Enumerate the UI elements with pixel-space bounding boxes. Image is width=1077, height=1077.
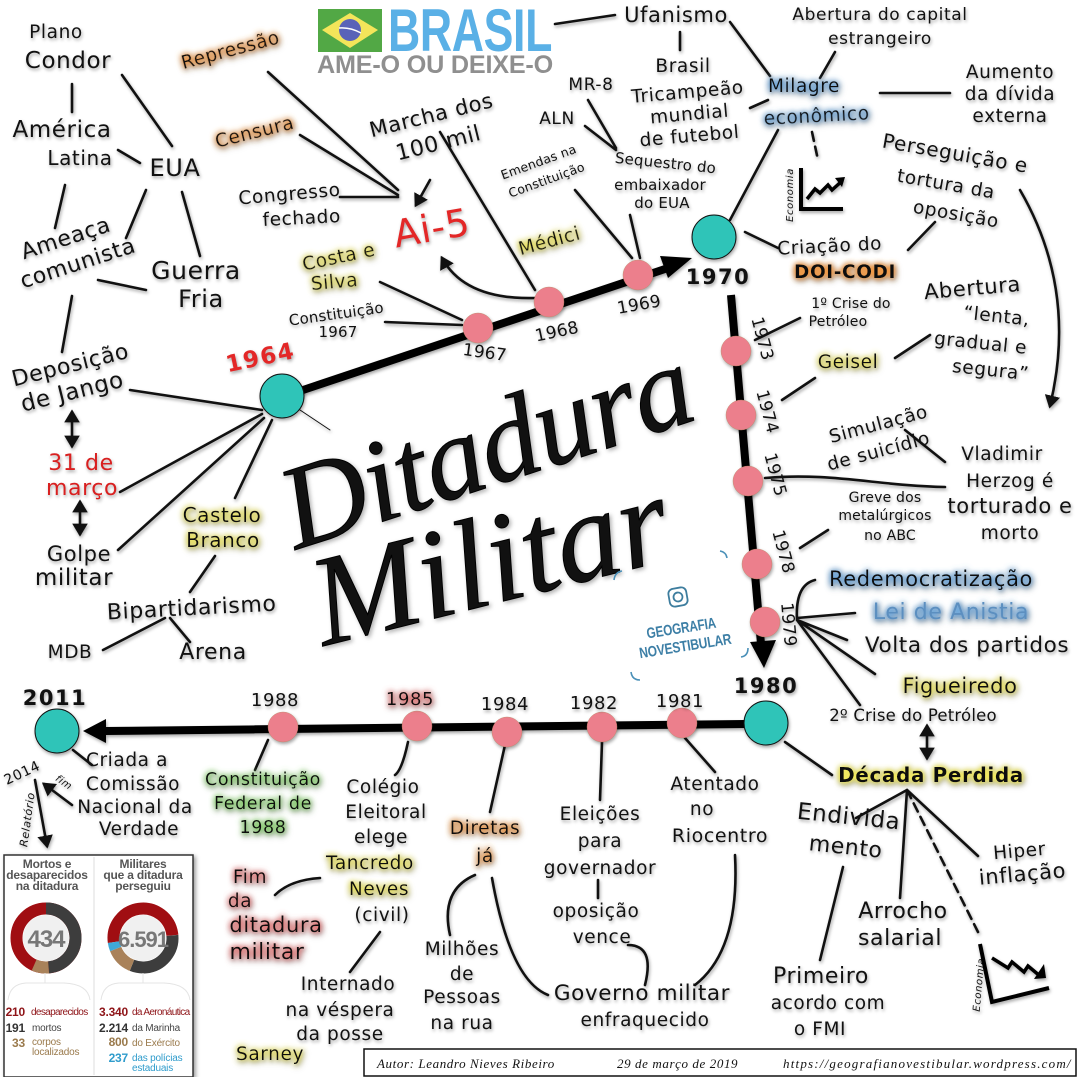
stats left legend: 191 bbox=[6, 1021, 26, 1035]
stats left legend: mortos bbox=[32, 1023, 62, 1034]
bottom right cluster: Década Perdida: o FMI bbox=[794, 1019, 846, 1040]
bottom cluster: events 1981 to 1988: vence bbox=[573, 927, 631, 948]
right cluster: 1973 to 1979: Década Perdida bbox=[838, 763, 1024, 787]
year labels: 1968 bbox=[533, 318, 581, 346]
stats right legend: da Marinha bbox=[132, 1023, 181, 1034]
top centre cluster: AI-5 bbox=[179, 27, 717, 341]
bottom cluster: events 1981 to 1988: na véspera bbox=[286, 1000, 394, 1021]
top right cluster: Milagre econômico: Abertura do capital bbox=[792, 5, 968, 25]
icon: instagram bbox=[668, 587, 688, 607]
top right cluster: Milagre econômico: estrangeiro bbox=[828, 29, 932, 49]
bottom cluster: events 1981 to 1988: Nacional da bbox=[77, 797, 193, 818]
bottom cluster: events 1981 to 1988 bbox=[2, 750, 768, 1065]
central title: Ditadura Militar: Militar bbox=[295, 447, 684, 674]
bottom right cluster: Década Perdida: inflação bbox=[978, 858, 1067, 890]
top centre cluster: AI-5: 1967 bbox=[319, 323, 357, 341]
bottom cluster: events 1981 to 1988: de bbox=[450, 964, 474, 985]
bottom cluster: events 1981 to 1988: militar bbox=[229, 940, 305, 965]
bottom cluster: events 1981 to 1988: Criada a bbox=[86, 750, 168, 771]
corner marks bbox=[614, 551, 748, 680]
left cluster: Plano Condor, EUA, Guerra Fria: Condor bbox=[25, 48, 111, 74]
top centre cluster: AI-5: Congresso bbox=[238, 180, 341, 209]
logo: Brasil ame-o ou deixe-o: AME-O OU DEIXE-O bbox=[317, 51, 553, 79]
right cluster: 1973 to 1979: Redemocratização bbox=[829, 567, 1033, 591]
arrows bbox=[35, 180, 1059, 846]
right cluster: 1973 to 1979: no ABC bbox=[864, 528, 916, 544]
right cluster: 1973 to 1979: Greve dos bbox=[849, 490, 921, 506]
instagram tag bbox=[614, 551, 748, 680]
left cluster: Plano Condor, EUA, Guerra Fria: EUA bbox=[150, 154, 200, 182]
bottom cluster: events 1981 to 1988: oposição bbox=[553, 901, 639, 922]
bottom right cluster: Década Perdida: Arrocho bbox=[858, 899, 948, 924]
year labels: 1979 bbox=[776, 602, 800, 647]
top centre cluster: AI-5: Marcha dos bbox=[367, 88, 496, 142]
year labels: 1964 bbox=[224, 338, 297, 378]
left cluster: Plano Condor, EUA, Guerra Fria: 31 de bbox=[48, 451, 114, 476]
top centre cluster: AI-5: Constituição bbox=[506, 159, 587, 201]
top right cluster: Milagre econômico: oposição bbox=[911, 197, 1001, 232]
right cluster: 1973 to 1979: segura” bbox=[951, 356, 1030, 385]
year labels: 1967 bbox=[461, 340, 508, 366]
top centre cluster: AI-5: 100 mil bbox=[393, 121, 484, 166]
year labels: 1969 bbox=[616, 291, 663, 319]
right cluster: 1973 to 1979: de suicídio bbox=[825, 428, 932, 475]
top right cluster: Milagre econômico: Criação do bbox=[777, 233, 883, 260]
right cluster: 1973 to 1979: “lenta, bbox=[962, 303, 1031, 330]
stats right legend: 3.340 bbox=[99, 1005, 129, 1019]
right cluster: 1973 to 1979: Volta dos partidos bbox=[865, 633, 1069, 658]
pink date nodes bbox=[268, 260, 780, 747]
stats left legend: 210 bbox=[6, 1005, 26, 1019]
left cluster: Plano Condor, EUA, Guerra Fria: Castelo bbox=[183, 503, 261, 527]
right cluster: 1973 to 1979: morto bbox=[981, 523, 1039, 544]
stats left legend: corpos bbox=[32, 1037, 61, 1048]
top centre cluster: AI-5: Repressão bbox=[179, 27, 282, 74]
bottom cluster: events 1981 to 1988: Diretas bbox=[450, 818, 520, 839]
icon: economy rising chart: Economia bbox=[785, 168, 796, 222]
top right cluster: Milagre econômico: de futebol bbox=[639, 122, 740, 151]
bottom cluster: events 1981 to 1988: no bbox=[690, 799, 714, 820]
bottom cluster: events 1981 to 1988: enfraquecido bbox=[580, 1010, 710, 1031]
top right cluster: Milagre econômico: externa bbox=[972, 106, 1048, 127]
bottom cluster: events 1981 to 1988: já bbox=[475, 846, 494, 867]
right cluster: 1973 to 1979: Geisel bbox=[818, 352, 878, 373]
stats right legend: do Exército bbox=[132, 1038, 180, 1049]
bottom cluster: events 1981 to 1988: na rua bbox=[430, 1013, 494, 1034]
stats right legend: 237 bbox=[109, 1051, 129, 1065]
right cluster: 1973 to 1979: Lei de Anistia bbox=[873, 600, 1029, 625]
bottom cluster: events 1981 to 1988: (civil) bbox=[354, 905, 410, 926]
panel: statistics: perseguiu bbox=[115, 879, 171, 893]
year labels: 1974 bbox=[751, 388, 782, 436]
bottom cluster: events 1981 to 1988: Tancredo bbox=[325, 853, 414, 874]
right cluster: 1973 to 1979: Figueiredo bbox=[902, 674, 1018, 698]
bottom cluster: events 1981 to 1988: Fim bbox=[233, 867, 267, 888]
left cluster: Plano Condor, EUA, Guerra Fria: março bbox=[46, 476, 118, 501]
top centre cluster: AI-5: Silva bbox=[310, 270, 359, 295]
footer: Autor: Leandro Nieves Ribeiro bbox=[376, 1056, 555, 1071]
left cluster: Plano Condor, EUA, Guerra Fria: Latina bbox=[47, 146, 113, 170]
bottom cluster: events 1981 to 1988: Federal de bbox=[214, 794, 312, 814]
icon: economy falling chart bbox=[972, 944, 1049, 1012]
right cluster: 1973 to 1979: gradual e bbox=[933, 328, 1028, 359]
bottom right cluster: Década Perdida: salarial bbox=[858, 926, 942, 951]
bottom cluster: events 1981 to 1988: ditadura bbox=[229, 913, 323, 937]
icon: Brazilian flag bbox=[318, 9, 382, 52]
top centre cluster: AI-5: MR-8 bbox=[568, 75, 614, 95]
panel: statistics: 434 bbox=[27, 926, 66, 953]
right cluster: 1973 to 1979: Abertura bbox=[923, 272, 1022, 304]
top right cluster: Milagre econômico: Perseguição e bbox=[881, 128, 1030, 178]
top right cluster: Milagre econômico bbox=[624, 3, 1055, 283]
panel: statistics: na ditadura bbox=[16, 879, 79, 893]
stats right legend: das polícias bbox=[132, 1053, 183, 1064]
top right cluster: Milagre econômico: DOI-CODI bbox=[794, 262, 896, 283]
year labels: 1981 bbox=[656, 691, 704, 712]
bottom cluster: events 1981 to 1988: Governo militar bbox=[554, 981, 730, 1006]
top centre cluster: AI-5: Ai-5 bbox=[390, 200, 473, 257]
icon: economy rising chart bbox=[785, 168, 845, 222]
bottom right cluster: Década Perdida: Endivida bbox=[796, 799, 902, 835]
bottom cluster: events 1981 to 1988: Eleições bbox=[560, 804, 640, 825]
left cluster: Plano Condor, EUA, Guerra Fria: MDB bbox=[48, 642, 92, 663]
bottom cluster: events 1981 to 1988: elege bbox=[354, 827, 408, 848]
left cluster: Plano Condor, EUA, Guerra Fria: América bbox=[12, 117, 112, 143]
top centre cluster: AI-5: fechado bbox=[262, 206, 341, 231]
top centre cluster: AI-5: Constituição bbox=[288, 298, 385, 330]
left cluster: Plano Condor, EUA, Guerra Fria: militar bbox=[35, 565, 113, 591]
left cluster: Plano Condor, EUA, Guerra Fria: Golpe bbox=[47, 542, 111, 566]
bottom cluster: events 1981 to 1988: 1988 bbox=[240, 818, 286, 838]
top right cluster: Milagre econômico: Aumento bbox=[966, 62, 1054, 83]
bottom cluster: events 1981 to 1988: Milhões bbox=[425, 939, 499, 960]
left cluster: Plano Condor, EUA, Guerra Fria: Fria bbox=[178, 285, 224, 313]
bottom cluster: events 1981 to 1988: 2014 bbox=[2, 758, 43, 789]
footer: 29 de março de 2019 bbox=[617, 1056, 738, 1071]
year labels: 1973 bbox=[746, 315, 777, 363]
year labels: 1984 bbox=[481, 694, 529, 715]
left cluster: Plano Condor, EUA, Guerra Fria: Plano bbox=[29, 22, 83, 43]
top right cluster: Milagre econômico: Brasil bbox=[655, 56, 711, 77]
logo: Brasil ame-o ou deixe-o bbox=[317, 0, 553, 79]
icon: economy falling chart: Economia bbox=[972, 957, 987, 1012]
top right cluster: Milagre econômico: da dívida bbox=[965, 84, 1055, 105]
bottom right cluster: Década Perdida bbox=[771, 799, 1067, 1040]
left cluster: Plano Condor, EUA, Guerra Fria: Branco bbox=[186, 528, 260, 552]
left cluster: Plano Condor, EUA, Guerra Fria bbox=[9, 22, 277, 665]
year labels bbox=[23, 265, 800, 715]
brace lines bbox=[8, 973, 190, 1000]
stats right legend: estaduais bbox=[132, 1063, 173, 1074]
top right cluster: Milagre econômico: Tricampeão bbox=[630, 77, 745, 108]
year labels: 1980 bbox=[734, 674, 798, 698]
right cluster: 1973 to 1979: Simulação bbox=[827, 401, 930, 448]
top right cluster: Milagre econômico: Milagre bbox=[768, 76, 840, 97]
thin connector lines bbox=[55, 15, 978, 995]
left cluster: Plano Condor, EUA, Guerra Fria: Ameaça bbox=[18, 213, 114, 265]
bottom right cluster: Década Perdida: Primeiro bbox=[773, 964, 869, 989]
left cluster: Plano Condor, EUA, Guerra Fria: Guerra bbox=[151, 256, 241, 285]
bottom cluster: events 1981 to 1988: da posse bbox=[296, 1024, 384, 1045]
year labels: 1982 bbox=[570, 693, 618, 714]
year labels: 1970 bbox=[686, 265, 750, 289]
panel: statistics bbox=[4, 855, 193, 1077]
right cluster: 1973 to 1979: metalúrgicos bbox=[838, 508, 932, 524]
left cluster: Plano Condor, EUA, Guerra Fria: Deposição bbox=[9, 339, 132, 392]
bottom cluster: events 1981 to 1988: Colégio bbox=[346, 777, 420, 798]
top centre cluster: AI-5: do EUA bbox=[634, 194, 690, 212]
bottom cluster: events 1981 to 1988: Sarney bbox=[236, 1044, 304, 1065]
bottom cluster: events 1981 to 1988: Eleitoral bbox=[345, 802, 427, 823]
left cluster: Plano Condor, EUA, Guerra Fria: Bipartidarismo bbox=[106, 592, 277, 625]
left cluster: Plano Condor, EUA, Guerra Fria: comunista bbox=[17, 233, 139, 294]
right cluster: 1973 to 1979: 2º Crise do Petróleo bbox=[829, 706, 997, 725]
top centre cluster: AI-5: Emendas na bbox=[499, 141, 578, 182]
left cluster: Plano Condor, EUA, Guerra Fria: Arena bbox=[179, 640, 247, 665]
footer: https://geografianovestibular.wordpress.com/ bbox=[783, 1056, 1072, 1071]
right cluster: 1973 to 1979 bbox=[809, 272, 1073, 787]
right cluster: 1973 to 1979: Petróleo bbox=[809, 314, 867, 330]
bottom right cluster: Década Perdida: acordo com bbox=[771, 993, 885, 1014]
year labels: 2011 bbox=[23, 686, 87, 710]
stats left legend: desaparecidos bbox=[31, 1007, 88, 1018]
footer bbox=[364, 1049, 1076, 1076]
teal year nodes bbox=[35, 215, 788, 753]
bottom cluster: events 1981 to 1988: Pessoas bbox=[423, 987, 501, 1008]
year labels: 1985 bbox=[386, 689, 434, 710]
right cluster: 1973 to 1979: 1º Crise do bbox=[811, 296, 891, 312]
stats right legend bbox=[99, 1005, 191, 1074]
stats right legend: 2.214 bbox=[99, 1021, 129, 1035]
top centre cluster: AI-5: Médici bbox=[516, 223, 583, 260]
right cluster: 1973 to 1979: torturado e bbox=[947, 494, 1073, 518]
bottom cluster: events 1981 to 1988: Riocentro bbox=[672, 825, 768, 847]
bottom cluster: events 1981 to 1988: fim bbox=[53, 773, 74, 793]
stats left legend: localizados bbox=[32, 1047, 79, 1058]
top right cluster: Milagre econômico: Ufanismo bbox=[624, 3, 728, 27]
central title: Ditadura Militar: Ditadura bbox=[262, 319, 708, 575]
bottom right cluster: Década Perdida: mento bbox=[808, 831, 884, 864]
stats right legend: 800 bbox=[109, 1035, 129, 1049]
top centre cluster: AI-5: Censura bbox=[213, 113, 296, 153]
left cluster: Plano Condor, EUA, Guerra Fria: de Jango bbox=[18, 367, 126, 418]
stats right legend: da Aeronáutica bbox=[132, 1007, 191, 1018]
year labels: 1978 bbox=[767, 528, 798, 576]
bottom cluster: events 1981 to 1988: para bbox=[578, 831, 622, 852]
bottom cluster: events 1981 to 1988: Neves bbox=[349, 879, 409, 900]
year labels: 1975 bbox=[759, 451, 790, 499]
bottom cluster: events 1981 to 1988: Comissão bbox=[86, 774, 180, 795]
donut chart: dead and missing bbox=[14, 906, 78, 970]
bottom cluster: events 1981 to 1988: Relatório bbox=[17, 791, 38, 848]
timeline thick arrows bbox=[83, 256, 776, 743]
stats left legend: 33 bbox=[12, 1036, 26, 1050]
top right cluster: Milagre econômico: econômico bbox=[763, 103, 870, 130]
bottom cluster: events 1981 to 1988: governador bbox=[544, 858, 656, 879]
top right cluster: Milagre econômico: mundial bbox=[649, 101, 730, 128]
stats left header: Mortos e bbox=[23, 857, 72, 871]
top centre cluster: AI-5: embaixador bbox=[614, 176, 706, 194]
instagram tag: NOVESTIBULAR bbox=[638, 631, 733, 662]
stats right header: Militares bbox=[120, 857, 167, 871]
bottom right cluster: Década Perdida: Hiper bbox=[992, 839, 1047, 864]
top centre cluster: AI-5: ALN bbox=[539, 109, 575, 129]
year labels: 1988 bbox=[251, 690, 299, 711]
top centre cluster: AI-5: Sequestro do bbox=[614, 149, 717, 177]
top right cluster: Milagre econômico: tortura da bbox=[895, 166, 997, 204]
stats left legend bbox=[6, 1005, 88, 1058]
right cluster: 1973 to 1979: Herzog é bbox=[966, 471, 1054, 492]
right cluster: 1973 to 1979: Vladimir bbox=[961, 444, 1043, 465]
panel: statistics: desaparecidos bbox=[6, 868, 88, 882]
bottom cluster: events 1981 to 1988: Constituição bbox=[205, 770, 321, 790]
panel: statistics: 6.591 bbox=[118, 927, 169, 952]
donut chart: persecuted military bbox=[105, 900, 181, 976]
bottom cluster: events 1981 to 1988: Internado bbox=[301, 974, 395, 995]
panel: statistics: que a ditadura bbox=[103, 868, 183, 882]
bottom cluster: events 1981 to 1988: Verdade bbox=[99, 819, 179, 840]
instagram tag: GEOGRAFIA bbox=[645, 615, 717, 642]
bottom cluster: events 1981 to 1988: Atentado bbox=[670, 774, 760, 795]
top centre cluster: AI-5: Costa e bbox=[301, 240, 377, 276]
bottom cluster: events 1981 to 1988: da bbox=[228, 891, 252, 912]
